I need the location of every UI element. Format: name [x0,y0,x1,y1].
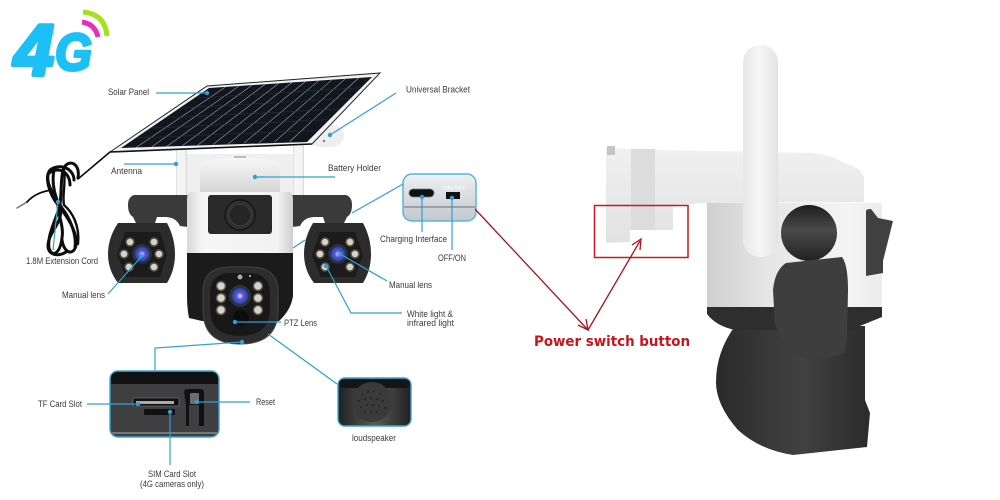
component labels: Universal Bracket [406,84,470,94]
component labels: SIM Card Slot [148,469,196,479]
4G logo [12,11,107,91]
side view: bracket notch [607,146,615,155]
side view: dome [716,326,870,455]
red highlight box [594,206,688,258]
PTZ lens and lights [216,274,262,326]
side view: top bracket [606,148,864,243]
side view: antenna [743,45,778,257]
component labels: Manual lens [62,290,105,300]
side view: ball joint [781,205,837,261]
right side camera [304,223,371,283]
left side camera [108,223,175,283]
callout: loudspeaker panel [338,378,411,426]
side view: dark collar [707,307,882,330]
component labels: Battery Holder [328,163,381,173]
callout: card slots panel [110,371,219,437]
4G logo: G [55,24,92,82]
side view: bracket clamp [631,149,655,230]
side view: neck arm [773,257,848,360]
component labels: White light & [407,309,453,319]
callout: charging and switch detail: ON OFF [443,186,466,192]
leader lines [53,91,454,465]
component labels: PTZ Lens [284,318,317,328]
component labels: Reset [256,397,275,407]
component labels: Solar Panel [108,87,149,97]
component labels: Manual lens [389,280,432,290]
callout: charging and switch detail [403,174,476,221]
side view: white body [707,203,882,307]
side view: rear dark plate [866,209,893,276]
side arms [128,195,352,227]
side view camera [606,45,893,455]
component labels: Charging Interface [380,234,447,244]
power switch label: Power switch button [534,334,690,350]
component labels: Antenna [111,166,142,176]
component labels: 1.8M Extension Cord [26,256,98,266]
component labels: OFF/ON [438,253,466,263]
red arrows [475,209,641,330]
center camera housing [187,192,293,344]
component labels: loudspeaker [352,433,396,443]
component labels [26,84,470,489]
support posts [176,144,304,200]
extension cord [17,152,110,255]
component labels: (4G cameras only) [140,479,204,489]
component labels: TF Card Slot [38,399,82,409]
component labels: infrared light [407,318,454,328]
universal bracket mount [312,125,344,147]
4G logo: 4 [12,11,54,91]
battery holder [187,154,293,194]
solar panel [110,73,380,152]
